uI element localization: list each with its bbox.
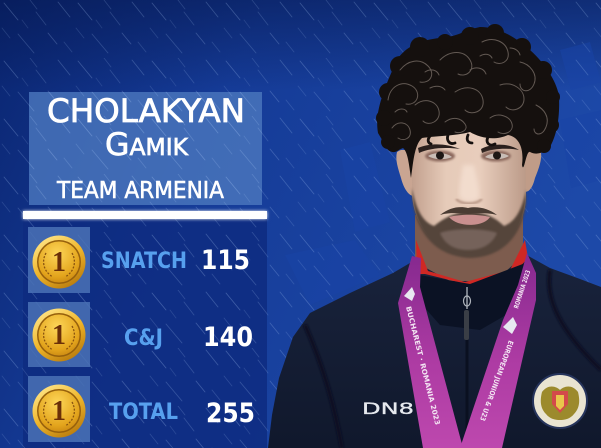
- gold medal: total: [32, 384, 86, 438]
- label: clean and jerk: C&J: [124, 325, 163, 351]
- name panel: [29, 92, 262, 205]
- total row: [28, 376, 255, 442]
- jacket shading: [305, 270, 601, 448]
- mouth: [449, 215, 490, 225]
- results panel: [23, 219, 267, 448]
- medal tile: total: [28, 376, 90, 442]
- gold medal: clean and jerk: [32, 308, 86, 362]
- eyebrow: left: [418, 144, 460, 153]
- surname: CHOLAKYAN: [47, 92, 245, 130]
- medal ribbon: right: [460, 253, 536, 448]
- eye: right: [481, 150, 511, 162]
- medal tile: snatch: [28, 227, 90, 293]
- right ribbon year text: ROMANIA 2023: [512, 269, 532, 310]
- chin beard: [440, 229, 497, 250]
- first name: GAMIK: [105, 127, 189, 163]
- forehead curls: [428, 135, 495, 145]
- value: clean and jerk: 140: [203, 322, 253, 353]
- medal tile: clean and jerk: [28, 302, 90, 367]
- neck: [415, 215, 523, 281]
- sponsor logo: DN8: [362, 399, 414, 418]
- label: snatch: SNATCH: [101, 248, 187, 274]
- right ribbon logo: [503, 317, 517, 334]
- left ribbon text: BUCHAREST · ROMANIA 2023: [404, 306, 441, 426]
- ear: right: [523, 150, 541, 192]
- white divider bar: [23, 211, 267, 219]
- athlete photo: [268, 24, 601, 448]
- left ribbon logo: [404, 287, 415, 301]
- right ribbon text: EUROPEAN JUNIOR & U23: [478, 339, 515, 422]
- clean and jerk row: [28, 302, 253, 367]
- team: TEAM ARMENIA: [56, 178, 224, 204]
- gold medal: snatch: [32, 236, 86, 288]
- eye: left: [425, 150, 455, 162]
- medal ribbon: left: [398, 256, 463, 448]
- eyebrow: right: [481, 145, 519, 153]
- ear: left: [396, 150, 417, 196]
- value: snatch: 115: [201, 245, 250, 276]
- hair lumps: [376, 24, 560, 153]
- label: total: TOTAL: [109, 399, 178, 425]
- nose: [459, 165, 479, 202]
- value: total: 255: [206, 398, 255, 429]
- curly hair: [376, 24, 560, 178]
- moustache: [440, 207, 497, 215]
- face: [412, 120, 526, 255]
- nose base shadow: [456, 199, 482, 204]
- athlete jacket: [268, 253, 601, 448]
- jacket collar: [414, 240, 532, 448]
- armenia crest badge: [533, 374, 587, 428]
- snatch row: [28, 227, 250, 293]
- beard: [412, 188, 526, 258]
